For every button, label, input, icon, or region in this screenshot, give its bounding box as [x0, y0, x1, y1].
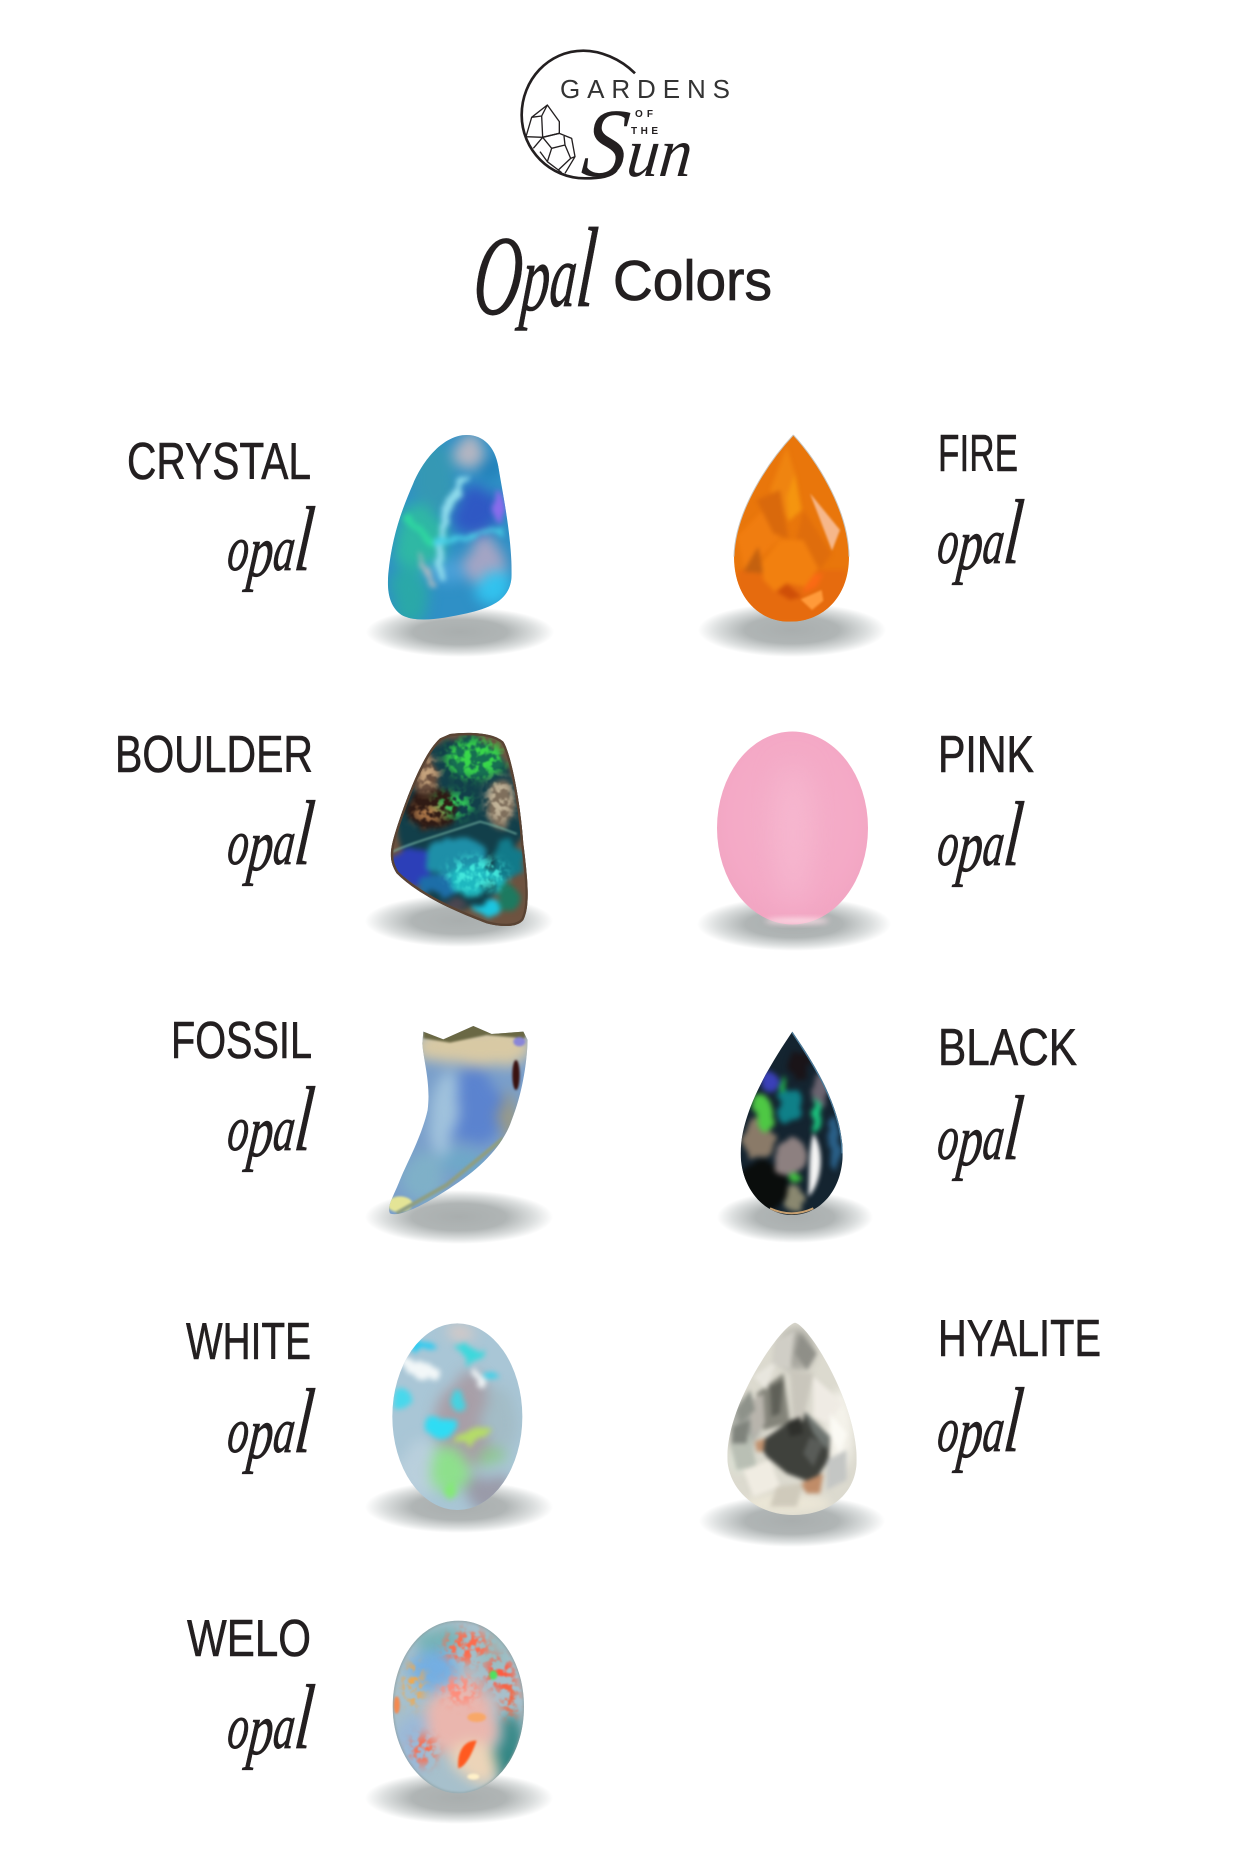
label: CRYSTAL — [127, 433, 311, 491]
script label: o — [225, 513, 253, 584]
panel: crystal opal — [127, 430, 554, 657]
panel: welo opal — [187, 1610, 553, 1824]
fire opal rim — [734, 435, 849, 557]
logo: Gardens of the Sun — [522, 51, 730, 198]
script label: l — [1000, 783, 1028, 885]
script label: p — [951, 1392, 987, 1474]
icon: black opal gem — [717, 1027, 873, 1243]
label: FOSSIL — [171, 1012, 312, 1070]
script label: p — [242, 805, 278, 887]
title: Opal Colors — [469, 204, 772, 339]
script label: p — [242, 1393, 278, 1475]
script label: p — [242, 1091, 278, 1173]
script label: l — [1000, 1369, 1028, 1471]
script label: l — [1000, 481, 1028, 583]
icon: fire opal gem — [698, 430, 886, 657]
title script word: l — [572, 204, 602, 331]
icon: welo opal gem — [365, 1617, 553, 1824]
script label: o — [935, 1394, 963, 1465]
logo word: GARDENS: GARDENS — [560, 74, 730, 104]
script label: p — [951, 504, 987, 586]
label: WHITE — [186, 1313, 311, 1371]
script label: p — [951, 1100, 987, 1182]
title script word: p — [514, 224, 555, 331]
script label: a — [980, 1102, 1008, 1173]
panel: pink opal — [697, 726, 1034, 951]
icon: hyalite opal gem — [699, 1320, 885, 1547]
script label: l — [291, 1068, 319, 1170]
script label: a — [980, 1394, 1008, 1465]
script label: p — [242, 511, 278, 593]
icon: boulder opal gem — [365, 727, 553, 947]
script label: o — [935, 808, 963, 879]
panel: boulder opal — [115, 726, 553, 947]
label: BOULDER — [115, 726, 313, 784]
icon: white opal gem — [365, 1320, 553, 1533]
title script word: O — [469, 212, 528, 339]
script label: p — [951, 806, 987, 888]
script label: o — [225, 1691, 253, 1762]
icon: pink opal gem — [697, 732, 891, 951]
panel: black opal — [717, 1019, 1077, 1243]
script label: o — [225, 807, 253, 878]
panel: fossil opal — [171, 1012, 553, 1244]
icon: crescent circle and crystals — [522, 51, 635, 178]
title script word: a — [546, 226, 581, 326]
panel: fire opal — [698, 425, 1028, 657]
label: PINK — [938, 726, 1034, 784]
script label: a — [270, 1691, 299, 1762]
script label: o — [225, 1093, 253, 1164]
script label: l — [291, 488, 319, 590]
logo word: OF: OF — [635, 109, 653, 120]
logo word: THE: THE — [631, 126, 658, 137]
panel: white opal — [186, 1313, 553, 1533]
label: BLACK — [938, 1019, 1077, 1077]
icon: fossil opal tooth — [365, 1020, 553, 1244]
script label: a — [270, 807, 299, 878]
script label: o — [935, 1102, 963, 1173]
label: FIRE — [938, 425, 1018, 483]
script label: o — [935, 506, 963, 577]
script label: a — [980, 808, 1008, 879]
icon: crystal opal gem — [366, 430, 554, 657]
panel: hyalite opal — [699, 1310, 1101, 1547]
script label: l — [291, 1370, 319, 1472]
script label: a — [270, 1395, 299, 1466]
label: WELO — [187, 1610, 311, 1668]
infographic: opal colors — [118, 49, 1100, 1823]
script label: l — [291, 1666, 319, 1768]
label: HYALITE — [938, 1310, 1101, 1368]
script label: a — [270, 513, 299, 584]
script label: l — [1000, 1077, 1028, 1179]
script label: a — [270, 1093, 299, 1164]
title sans word: Colors — [613, 249, 772, 313]
script label: l — [291, 782, 319, 884]
script label: a — [980, 506, 1008, 577]
script label: o — [225, 1395, 253, 1466]
script label: p — [242, 1689, 278, 1771]
logo word: Sun: Sun — [578, 89, 699, 198]
